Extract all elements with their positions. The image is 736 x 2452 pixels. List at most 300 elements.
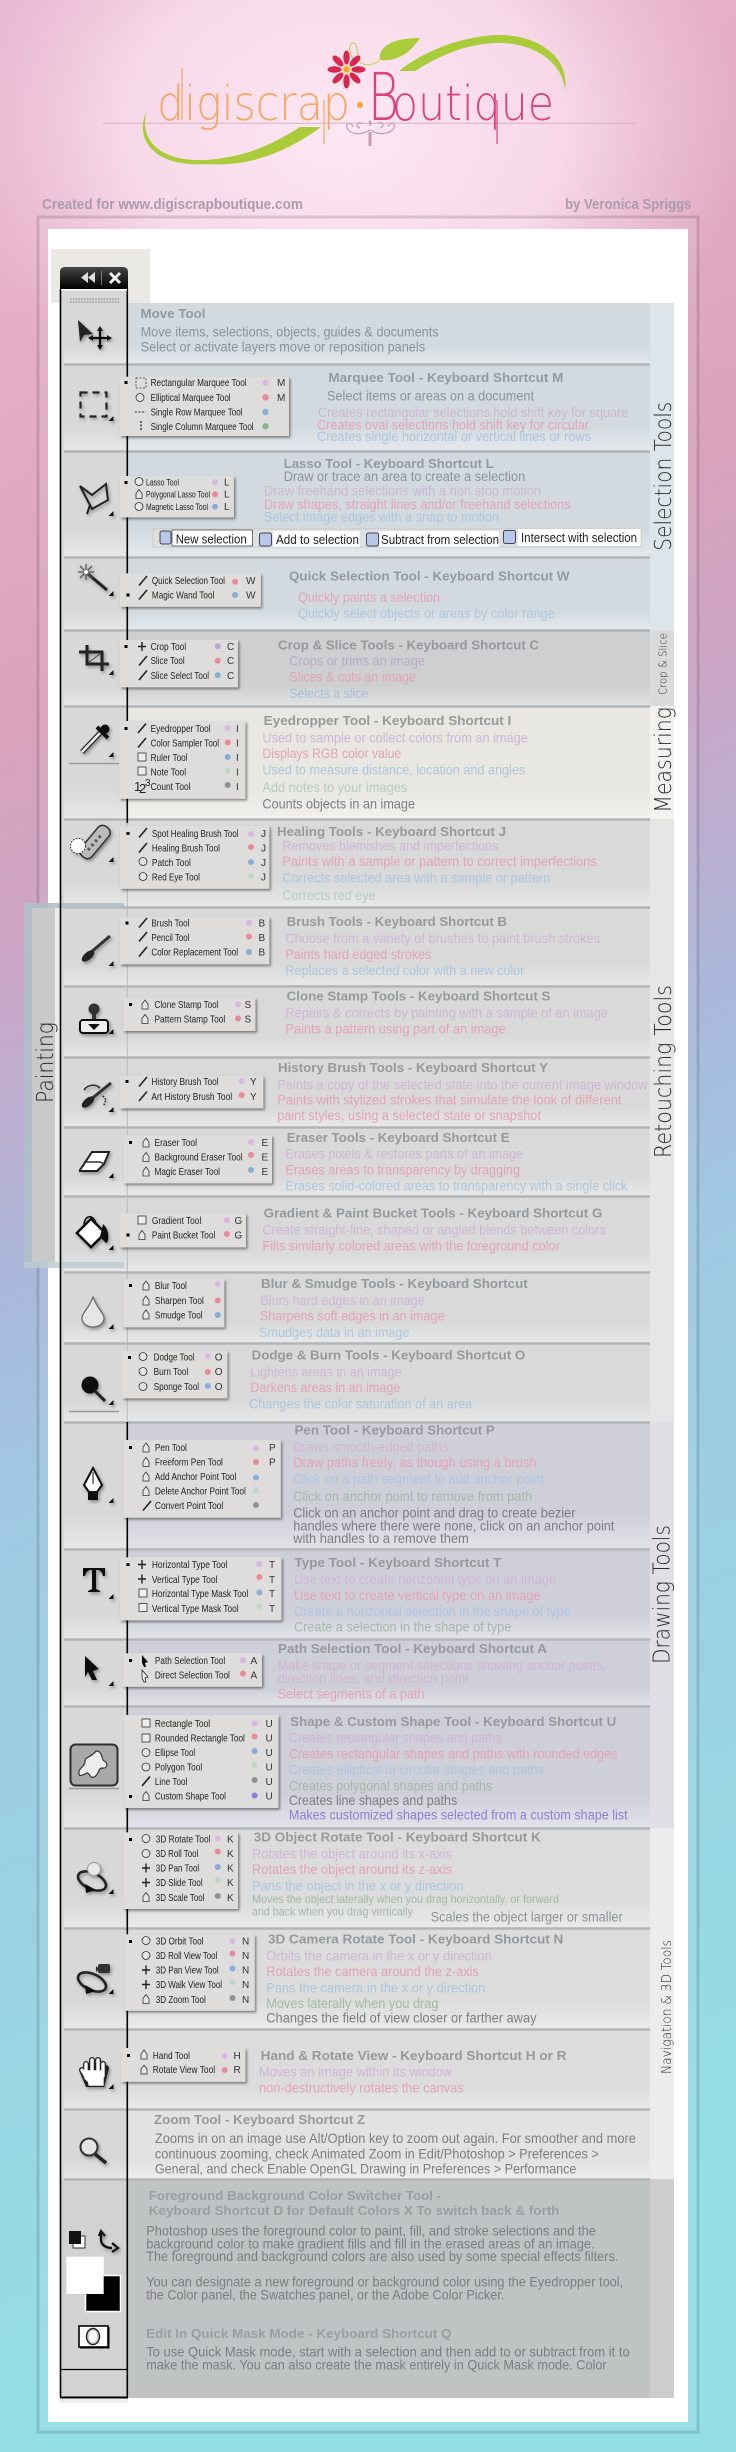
flyout: path selection: A [250, 1656, 258, 1667]
toolbar grip [70, 299, 120, 302]
description: healing: Healing Tools - Keyboard Shortcut J [277, 824, 506, 839]
description: hand: Moves an image within its window [259, 2064, 453, 2080]
description: type: Create a selection in the shape of type [294, 1619, 511, 1635]
flyout: 3D object: 3D Pan Tool [156, 1862, 199, 1874]
flyout: shape: U [266, 1777, 273, 1788]
flyout: healing: J [261, 872, 266, 884]
flyout: hand: H [234, 2051, 241, 2062]
flyout: 3D camera: 3D Roll View Tool [156, 1950, 217, 1962]
flyout: quick selection: Quick Selection Tool [152, 575, 225, 587]
icon: path selection [85, 1656, 114, 1686]
description: blur: Smudges data in an image [259, 1324, 410, 1340]
description: 3D camera: Orbits the camera in the x or y direction [266, 1947, 492, 1963]
flyout: type: Horizontal Type Tool [152, 1559, 227, 1571]
flyout: 3D camera: 3D Pan View Tool [156, 1964, 219, 1976]
row: History Brush Tools [80, 1060, 648, 1123]
icon: custom shape [70, 1744, 118, 1786]
row: Clone Stamp Tools [80, 988, 608, 1036]
description: 3D object: Rotates the object around its x-axis [252, 1845, 452, 1861]
icon: 3D camera [75, 1964, 114, 1996]
white panel [48, 229, 688, 2422]
flyout: blur: Blur Tool [155, 1280, 187, 1292]
icon: dodge [82, 1376, 114, 1405]
description: move [140, 306, 439, 355]
description: quick selection: Quickly paints a selection [298, 589, 440, 605]
description: eyedropper: Displays RGB color value [262, 745, 401, 761]
icon: stamp [80, 1004, 114, 1034]
category: Crop and Slice: Crop & Slice [656, 633, 670, 695]
toolbar backing [51, 249, 150, 303]
description: history brush: Paints with stylized strokes that simulate the look of different [277, 1092, 622, 1108]
logo ornament [347, 121, 394, 146]
description: foreground background [146, 2188, 623, 2302]
description: dodge: Lightens areas in an image [250, 1363, 402, 1379]
description: eraser: Eraser Tools - Keyboard Shortcut E [287, 1130, 510, 1145]
flyout: crop: C [227, 671, 234, 682]
description: eyedropper: Counts objects in an image [262, 795, 415, 811]
flyout: lasso: L [224, 478, 230, 488]
flyout: 3D object: 3D Rotate Tool [156, 1834, 210, 1846]
flyout: shape [124, 1715, 278, 1808]
row: Dodge and Burn [69, 1348, 525, 1412]
flyout: crop: Slice Tool [151, 655, 185, 667]
description: dodge: Dodge & Burn Tools - Keyboard Shortcut O [252, 1348, 525, 1362]
row: Pen Tool [84, 1422, 615, 1546]
category: Drawing Tools: Drawing Tools [650, 1525, 676, 1664]
description: eyedropper: Used to sample or collect colors from an image [262, 729, 528, 745]
description: type: Use text to create horizontal type on an image [294, 1571, 556, 1587]
flyout: eyedropper: Ruler Tool [151, 752, 188, 764]
flyout: lasso: L [224, 490, 230, 501]
description: pen: Click on an anchor point and drag to create bezier [293, 1504, 576, 1520]
description: shape: Creates polygonal shapes and paths [289, 1777, 492, 1793]
flyout: shape: Rounded Rectangle Tool [155, 1732, 245, 1744]
flyout: pen: Delete Anchor Point Tool [155, 1486, 246, 1498]
flyout: quick selection: W [246, 590, 256, 602]
flyout: 3D camera: N [242, 1936, 249, 1948]
flyout: lasso: Polygonal Lasso Tool [146, 490, 210, 501]
flyout: clone stamp: Clone Stamp Tool [154, 999, 218, 1011]
description: 3D object [252, 1830, 623, 1925]
flyout: 3D object [123, 1832, 238, 1909]
description: pen: Pen Tool - Keyboard Shortcut P [294, 1422, 495, 1438]
description: quick mask: make the mask. You can also create the mask entirely in Quick Mask mode. Color [146, 2357, 607, 2373]
flyout: shape: U [266, 1748, 273, 1759]
description: 3D object: Rotates the object around its z-axis [252, 1861, 452, 1877]
icon: brush [80, 936, 114, 966]
flyout: shape: Ellipse Tool [155, 1747, 195, 1759]
flyout: shape: U [266, 1762, 273, 1774]
description: marquee [317, 370, 629, 444]
flyout: blur [123, 1279, 224, 1327]
description: healing: Corrects selected area with a sample or pattern [282, 869, 550, 885]
flyout: dodge: Sponge Tool [154, 1381, 199, 1393]
row: Marquee Tool [80, 370, 629, 444]
flyout: quick selection: Magic Wand Tool [152, 590, 214, 602]
category: Measuring: Measuring [651, 707, 677, 813]
icon: default colors [69, 2231, 85, 2248]
logo word Boutique: B [368, 59, 399, 136]
flyout: 3D object: 3D Scale Tool [156, 1892, 204, 1904]
icon: lasso [80, 484, 114, 516]
flyout: 3D camera: 3D Orbit Tool [156, 1936, 204, 1948]
icon: marquee [80, 392, 114, 421]
flyout: healing: Red Eye Tool [152, 872, 200, 884]
icon: 3D rotate [75, 1862, 114, 1895]
flyout: history brush: History Brush Tool [151, 1076, 219, 1088]
description: dodge: Darkens areas in an image [250, 1379, 400, 1395]
description: foreground background: You can designate a new foreground or background color using the Eyedropper tool, [146, 2274, 623, 2290]
flyout: healing: Healing Brush Tool [152, 842, 220, 854]
description: 3D object: 3D Object Rotate Tool - Keyboard Shortcut K [254, 1830, 541, 1844]
description: history brush: paint styles, using a selected state or snapshot [277, 1107, 541, 1123]
flyout: marquee: Single Column Marquee Tool [151, 421, 254, 433]
flyout: dodge: Dodge Tool [154, 1352, 195, 1364]
description: zoom: Zooms in on an image use Alt/Option key to zoom out again. For smoother and more [155, 2130, 636, 2146]
row: Quick Selection Tool [78, 564, 570, 621]
description: foreground background: The foreground and background colors are also used by some special effects filters. [146, 2248, 618, 2264]
description: hand: non-destructively rotates the canvas [259, 2080, 464, 2096]
flyout: healing: J [261, 829, 266, 840]
flyout: shape: Line Tool [155, 1776, 187, 1788]
flyout: path selection: Direct Selection Tool [155, 1670, 230, 1682]
flyout: 3D object: K [227, 1893, 234, 1904]
description: pen [292, 1422, 615, 1546]
flyout: type: Vertical Type Tool [152, 1574, 217, 1586]
row: Move Tool [78, 306, 439, 355]
flyout: healing: Patch Tool [152, 857, 191, 869]
flyout: shape: Custom Shape Tool [155, 1790, 226, 1802]
flyout: eraser: Eraser Tool [154, 1137, 197, 1149]
description: 3D camera: Pans the camera in the x or y direction [266, 1979, 485, 1995]
description: gradient: Fills similarly colored areas with the foreground color [262, 1237, 560, 1253]
row: Foreground Background and Quick Mask [66, 2188, 630, 2373]
flyout: eyedropper: Eyedropper Tool [151, 723, 211, 735]
flyout: eyedropper: I [236, 768, 239, 778]
flyout: 3D object: 3D Slide Tool [156, 1877, 203, 1889]
flyout: gradient: G [234, 1216, 242, 1227]
description: shape: Creates line shapes and paths [289, 1792, 457, 1808]
flyout: pen [123, 1440, 281, 1518]
logo word digiscrap: digiscrap [157, 76, 350, 132]
description: shape: Creates rectangular shapes and paths with rounded edges [289, 1746, 618, 1762]
description: 3D object: Pans the object in the x or y direction [252, 1877, 464, 1893]
flyout: shape: U [266, 1719, 273, 1730]
flyout: healing [120, 826, 269, 889]
description: healing: Paints with a sample or pattern to correct imperfections [282, 853, 597, 869]
flyout: clone stamp: Pattern Stamp Tool [154, 1014, 225, 1026]
row: 3D Camera Rotate [75, 1932, 563, 2025]
description: type: Use text to create vertical type on an image [294, 1587, 541, 1603]
flyout: path selection [123, 1653, 262, 1687]
description: clone stamp: Repairs & corrects by painting with a sample of an image [285, 1004, 608, 1020]
description: lasso: Lasso Tool - Keyboard Shortcut L [284, 456, 494, 471]
flyout: 3D camera: N [242, 1995, 249, 2006]
row: Lasso Tool [80, 456, 641, 547]
description: clone stamp [285, 988, 608, 1036]
description: zoom: Zoom Tool - Keyboard Shortcut Z [154, 2112, 365, 2127]
flyout: eyedropper: I [236, 738, 239, 750]
description: 3D camera: Rotates the camera around the z-axis [266, 1963, 479, 1979]
icon: switch colors arrow [99, 2231, 118, 2252]
flyout: shape: U [266, 1792, 273, 1802]
description: hand: Hand & Rotate View - Keyboard Shortcut H or R [261, 2048, 567, 2063]
row: Brush Tools [80, 914, 600, 978]
description: marquee: Creates rectangular selections hold shift key for square [318, 404, 629, 420]
flyout: clone stamp: S [244, 1000, 252, 1011]
description: pen: Click on anchor point to remove from path [293, 1488, 532, 1504]
flyout: 3D camera: 3D Walk View Tool [156, 1979, 222, 1991]
description: path selection: Path Selection Tool - Keyboard Shortcut A [278, 1641, 548, 1656]
flyout: eraser: E [262, 1138, 268, 1149]
row: Blur and Smudge [82, 1276, 528, 1340]
row: Healing Tools [70, 823, 597, 903]
selection mode buttons: Add to selection [276, 532, 359, 547]
description: crop: Crop & Slice Tools - Keyboard Shortcut C [278, 638, 540, 652]
flyout: pen: Convert Point Tool [155, 1500, 223, 1512]
description: lasso: Select image edges with a snap to motion [264, 508, 499, 524]
row: Gradient and Paint Bucket [77, 1206, 606, 1253]
flyout: hand [121, 2048, 246, 2082]
flyout: lasso [120, 476, 234, 517]
flyout: brush [120, 917, 269, 964]
flyout: marquee: Rectangular Marquee Tool [151, 377, 247, 389]
description: eyedropper: Eyedropper Tool - Keyboard Shortcut I [264, 713, 511, 728]
description: clone stamp: Clone Stamp Tools - Keyboard Shortcut S [287, 988, 551, 1004]
flyout: eyedropper: Count Tool [151, 781, 191, 793]
flyout: hand: Rotate View Tool [153, 2064, 215, 2076]
flyout: gradient: Gradient Tool [152, 1215, 201, 1227]
flyout: brush: B [258, 948, 266, 958]
flyout: gradient: G [234, 1230, 242, 1242]
selection mode buttons: Intersect with selection [521, 530, 637, 545]
flyout: dodge: O [215, 1382, 223, 1393]
description: brush: Choose from a variety of brushes to paint brush strokes [285, 930, 600, 946]
category: Navigation and 3D Tools: Navigation & 3D Tools [660, 1940, 675, 2074]
selection mode buttons [153, 529, 641, 547]
icon: healing brush [70, 823, 114, 862]
flyout: marquee: M [277, 378, 285, 389]
icon: hand [82, 2060, 114, 2089]
description: foreground background: Keyboard Shortcut D for Default Colors X To switch back & forth [149, 2203, 560, 2218]
flyout: clone stamp: S [244, 1014, 252, 1026]
icon: type [83, 1568, 114, 1599]
flyout: eraser: Background Eraser Tool [154, 1152, 242, 1164]
description: move: Select or activate layers move or reposition panels [141, 339, 425, 355]
flyout: gradient [120, 1213, 246, 1247]
label: Painting: Painting [33, 1022, 59, 1103]
flyout: healing: Spot Healing Brush Tool [152, 828, 239, 840]
description: history brush: Paints a copy of the selected state into the current image window [277, 1076, 648, 1092]
row: Eyedropper Tool [69, 713, 528, 811]
flyout: 3D object: 3D Roll Tool [156, 1848, 198, 1860]
description: type [294, 1555, 571, 1635]
flyout: history brush [120, 1076, 263, 1108]
flyout: brush: B [258, 918, 266, 930]
flyout: pen: Freeform Pen Tool [155, 1456, 223, 1468]
flyout: 3D camera: N [242, 1951, 249, 1962]
category labels [650, 402, 677, 2074]
description: quick selection: Quickly select objects or areas by color range [298, 605, 555, 621]
logo word Boutique [368, 59, 554, 136]
description: shape: Creates elliptical or circular shapes and paths [289, 1762, 544, 1778]
description: brush: Brush Tools - Keyboard Shortcut B [287, 914, 507, 929]
flyout: 3D camera: 3D Zoom Tool [156, 1994, 206, 2006]
description: lasso: Draw shapes, straight lines and/or freehand selections [264, 496, 571, 512]
row: 3D Object Rotate [75, 1830, 623, 1925]
flyout: type: Horizontal Type Mask Tool [152, 1588, 248, 1600]
flyout: dodge: O [215, 1352, 223, 1364]
description: brush: Paints hard edged strokes [285, 946, 431, 962]
description: crop: Crops or trims an image [289, 653, 425, 669]
description: eraser: Erases solid-colored areas to transparency with a single click [285, 1178, 628, 1194]
flyout: crop: C [227, 656, 234, 667]
icon: move [78, 320, 112, 350]
description: eyedropper: Used to measure distance, location and angles [262, 761, 525, 777]
description: quick mask [146, 2326, 630, 2373]
flyout: brush: Pencil Tool [151, 932, 189, 944]
description: blur [259, 1276, 528, 1340]
description: path selection: Select segments of a path [278, 1686, 425, 1702]
description: foreground background: the Color panel, the Swatches panel, or the Adobe Color Picker. [146, 2286, 504, 2302]
description: healing [277, 824, 597, 903]
description: type: Create a horizontal selection in the shape of type [294, 1603, 571, 1619]
icon: magic wand [78, 564, 114, 596]
flyout: eyedropper: I [236, 753, 239, 764]
flyout: crop: C [227, 642, 234, 653]
flyout: healing: J [261, 858, 266, 869]
row: Shape Tool [69, 1714, 628, 1823]
flyout: path selection: A [250, 1670, 258, 1682]
flyout: shape: U [266, 1734, 273, 1744]
description: pen: Draw paths freely, as though using a brush [293, 1454, 536, 1470]
logo flower [328, 50, 366, 88]
flyout: eyedropper: I [236, 782, 239, 793]
description: crop [278, 638, 540, 701]
description: foreground background: Photoshop uses the foreground color to paint, fill, and stroke selections and the [146, 2222, 596, 2238]
description: healing: Corrects red eye [282, 887, 376, 903]
description: eraser: Erases pixels & restores parts of an image [285, 1146, 524, 1162]
credit left: Created for www.digiscrapboutique.com [42, 196, 303, 213]
description: marquee: Creates oval selections hold shift key for circular [317, 417, 589, 433]
description: crop: Slices & cuts an image [289, 669, 416, 685]
flyout: 3D object: K [227, 1864, 234, 1874]
description: eraser [285, 1130, 628, 1194]
description: foreground background: Foreground Background Color Switcher Tool - [149, 2188, 441, 2203]
description: blur: Sharpens soft edges in an image [260, 1308, 445, 1324]
selection mode buttons: Subtract from selection [381, 532, 499, 547]
description: gradient: Create straight-line, shaped or angled blends between colors [262, 1222, 606, 1238]
flyout: hand: R [234, 2065, 241, 2076]
icon: pen [84, 1468, 114, 1503]
flyout: eyedropper: 1 [134, 779, 141, 794]
description: 3D object: and back when you drag vertically [252, 1905, 413, 1919]
description: marquee: Marquee Tool - Keyboard Shortcut M [328, 370, 563, 385]
flyout: marquee: Elliptical Marquee Tool [151, 392, 231, 404]
flyout: 3D camera: N [242, 1966, 249, 1976]
description: eyedropper [262, 713, 528, 811]
description: pen: with handles to a remove them [292, 1530, 469, 1546]
icon: crop [79, 645, 114, 675]
description: dodge: Changes the color saturation of an area [249, 1395, 472, 1411]
description: hand [259, 2048, 567, 2096]
flyout: dodge: O [215, 1367, 223, 1378]
painting bracket [24, 903, 124, 1268]
flyout: 3D camera: N [242, 1980, 249, 1991]
description: history brush [277, 1060, 648, 1123]
flyout: quick selection [120, 573, 261, 607]
description: zoom: continuous zooming, check Animated Zoom in Edit/Photoshop > Preferences > [155, 2145, 599, 2161]
flyout: eyedropper: Note Tool [151, 766, 186, 778]
description: eraser: Erases areas to transparency by dragging [285, 1161, 520, 1177]
description: lasso: Draw or trace an area to create a selection [284, 468, 525, 484]
flyout: history brush: Y [250, 1092, 257, 1103]
description: 3D camera: 3D Camera Rotate Tool - Keyboard Shortcut N [268, 1932, 563, 1946]
description: blur: Blurs hard edges in an image [260, 1292, 425, 1308]
icon: quick mask [79, 2326, 108, 2348]
flyout: brush: B [258, 933, 266, 944]
icon: blur drop [82, 1297, 114, 1329]
description: move: Move Tool [140, 306, 206, 321]
description: 3D camera: Changes the field of view closer or farther away [266, 2009, 536, 2025]
flyout: lasso: Magnetic Lasso Tool [146, 502, 208, 513]
flyout: type: Vertical Type Mask Tool [152, 1603, 239, 1615]
flyout: eraser: E [262, 1152, 268, 1164]
description: gradient: Gradient & Paint Bucket Tools - Keyboard Shortcut G [264, 1206, 602, 1220]
flyout: shape: Polygon Tool [155, 1762, 202, 1774]
description: gradient [262, 1206, 606, 1253]
description: brush: Replaces a selected color with a new color [285, 962, 525, 978]
description: zoom: General, and check Enable OpenGL Drawing in Preferences > Performance [155, 2160, 577, 2176]
logo green swoosh lower [143, 110, 321, 165]
flyout: clone stamp [123, 998, 256, 1031]
flyout: eraser: Magic Eraser Tool [154, 1166, 220, 1178]
flyout: 3D object: K [227, 1849, 234, 1860]
flyout: brush: Brush Tool [151, 918, 189, 930]
icon: zoom [80, 2138, 106, 2163]
description: marquee: Select items or areas on a document [327, 387, 534, 403]
flyout: eyedropper: I [236, 724, 239, 735]
flyout: marquee [120, 377, 289, 436]
description: quick mask: To use Quick Mask mode, start with a selection and then add to or subtract from it to [146, 2344, 630, 2360]
flyout: blur: Sharpen Tool [155, 1295, 204, 1307]
description: path selection: direction lines, and direction point [278, 1670, 469, 1686]
flyout: eyedropper [119, 721, 246, 799]
flyout: pen: P [269, 1458, 276, 1468]
category: Retouching Tools: Retouching Tools [651, 985, 677, 1158]
flyout: history brush: Y [250, 1077, 257, 1088]
description: shape: Shape & Custom Shape Tool - Keyboard Shortcut U [290, 1714, 616, 1729]
flyout: type [120, 1557, 282, 1620]
row: Type Tool [83, 1555, 571, 1635]
description: 3D object: Moves the object laterally when you drag horizontally, or forward [252, 1892, 559, 1906]
flyout: eyedropper: 3 [145, 778, 151, 789]
toolbar header [60, 267, 128, 290]
flyout: pen: P [269, 1443, 276, 1454]
description: dodge [249, 1348, 525, 1411]
flyout: lasso: Lasso Tool [146, 478, 179, 488]
flyout: 3D object: K [227, 1878, 234, 1889]
logo word Boutique: outique [392, 76, 554, 132]
flyout: shape: Rectangle Tool [155, 1718, 210, 1730]
description: lasso [264, 456, 571, 524]
toolbar frame [60, 267, 128, 2403]
category: Selection Tools: Selection Tools [651, 402, 677, 551]
description: foreground background: background color to make gradient fills and fill in the erased areas of an image. [146, 2235, 595, 2251]
description: marquee: Creates single horizontal or vertical lines or rows [317, 428, 591, 444]
description: crop: Selects a slice [289, 685, 368, 701]
description: clone stamp: Paints a pattern using part of an image [285, 1020, 506, 1036]
